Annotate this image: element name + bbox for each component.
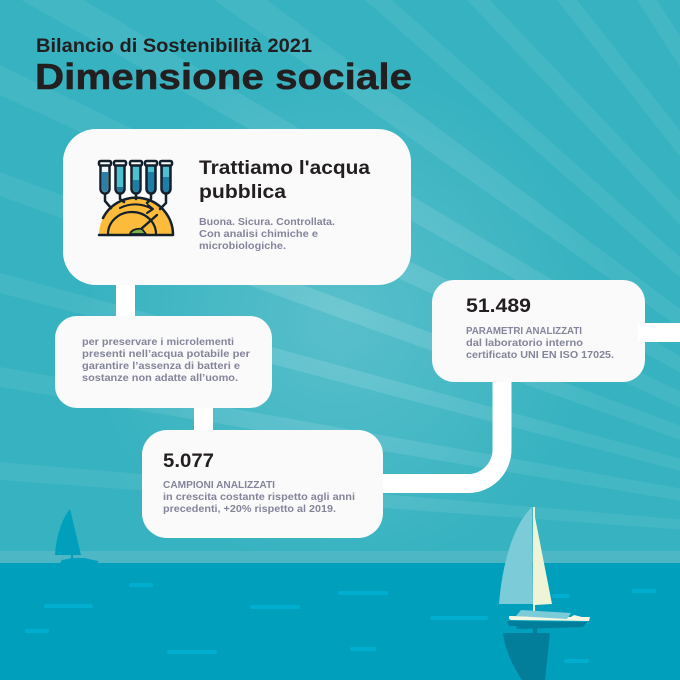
card: campioni analizzati [142, 430, 383, 538]
main sail [499, 507, 533, 604]
connectors between cards [116, 280, 502, 484]
card: microelementi text [55, 316, 272, 408]
number: 51.489 [466, 295, 531, 317]
description: PARAMETRI ANALIZZATI [466, 325, 582, 337]
card heading: Trattiamo l'acqua [199, 157, 370, 179]
card description: Buona. Sicura. Controllata. [199, 216, 335, 228]
wires [105, 193, 111, 208]
large sailboat [499, 507, 590, 680]
deck [516, 610, 571, 619]
number: 5.077 [163, 450, 214, 472]
title: Dimensione sociale [35, 56, 412, 97]
tubes [100, 165, 110, 194]
card description: microbiologiche. [199, 240, 286, 252]
description: dal laboratorio interno [466, 337, 583, 349]
mast [533, 507, 535, 611]
sea [0, 563, 680, 680]
card: Trattiamo l'acqua pubblica [63, 129, 411, 285]
card description: Con analisi chimiche e [199, 228, 318, 240]
description: precedenti, +20% rispetto al 2019. [163, 503, 336, 515]
card: microelementi text: presenti nell’acqua potabile per [82, 348, 250, 360]
description: CAMPIONI ANALIZZATI [163, 479, 275, 491]
icon: test tubes and gauge [99, 161, 173, 235]
card: microelementi text: garantire l’assenza di batteri e [82, 360, 240, 372]
subtitle: Bilancio di Sostenibilità 2021 [36, 36, 312, 57]
card: parametri analizzati [432, 280, 645, 382]
card: microelementi text: per preservare i microlementi [82, 336, 234, 348]
card: microelementi text: sostanze non adatte all’uomo. [82, 372, 238, 384]
reflection [503, 621, 587, 680]
description: certificato UNI EN ISO 17025. [466, 349, 614, 361]
jib sail [533, 507, 552, 605]
hull [509, 615, 590, 621]
card heading: pubblica [199, 181, 286, 203]
small distant sailboat [55, 509, 98, 563]
gauge [99, 198, 173, 235]
connector exiting right [638, 323, 680, 342]
description: in crescita costante rispetto agli anni [163, 491, 355, 503]
